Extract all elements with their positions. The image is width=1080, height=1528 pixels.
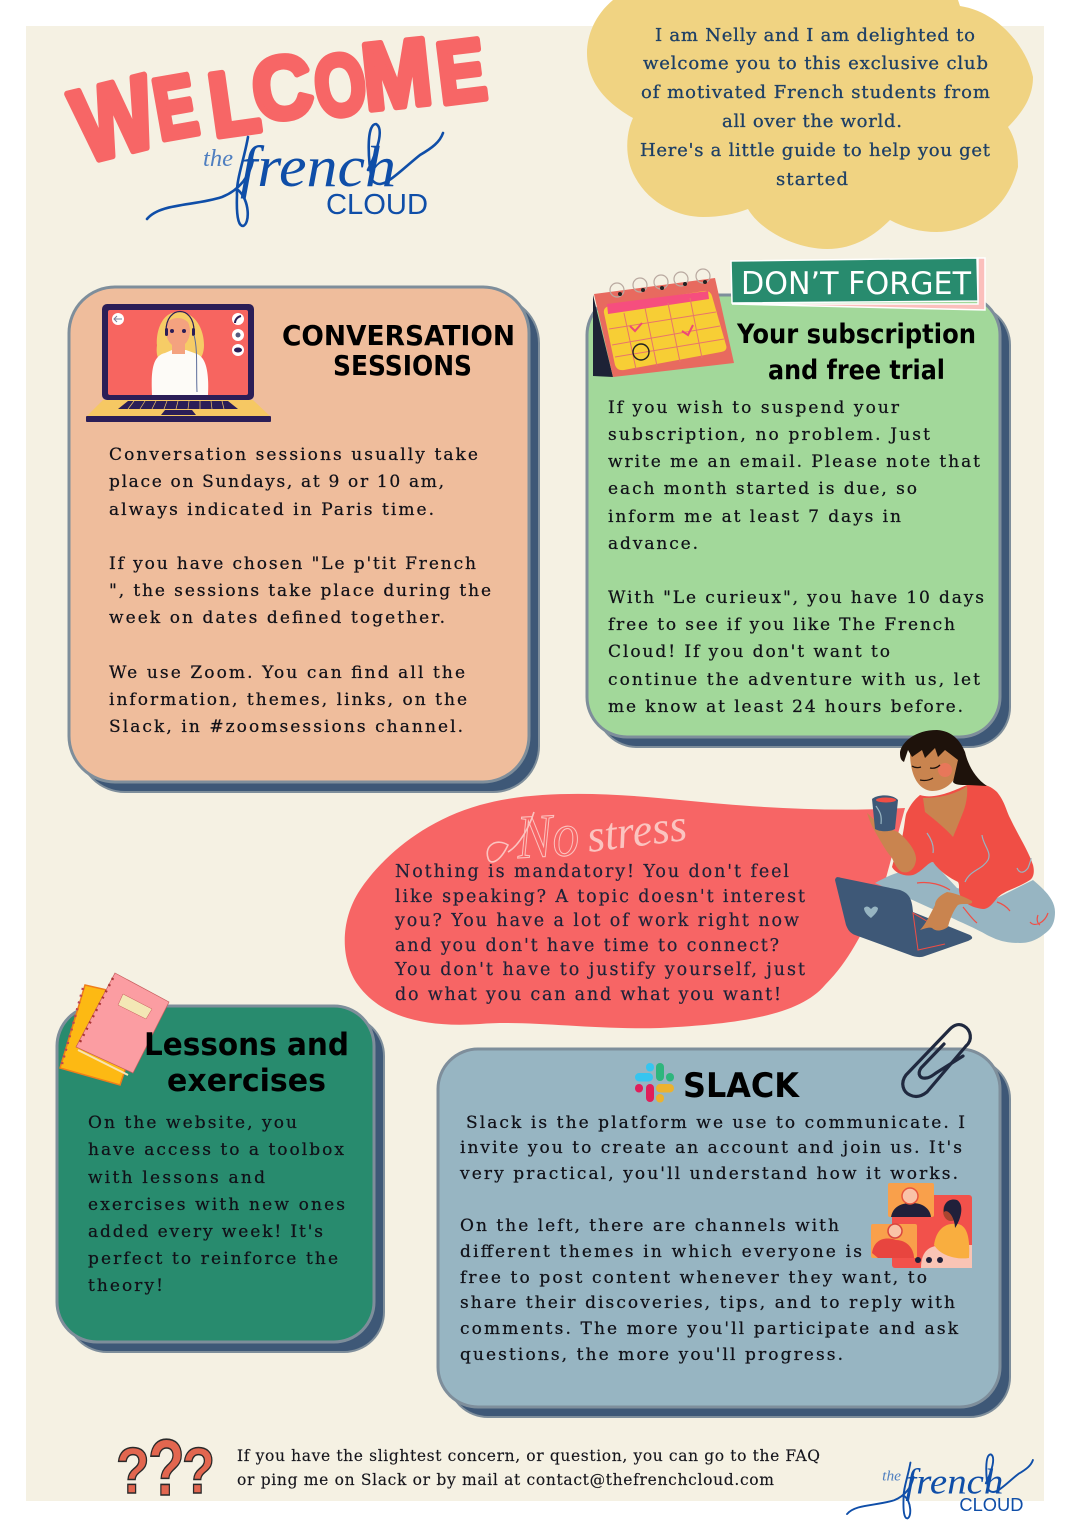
icon: slack logo xyxy=(635,1063,674,1102)
intro text: started xyxy=(776,169,848,190)
text: no stress body: Nothing is mandatory! You don't feel xyxy=(395,862,789,882)
text: no stress body: do what you can and what you want! xyxy=(395,985,781,1005)
text: conversation body: week on dates defined together. xyxy=(109,608,445,628)
text: subscription body: inform me at least 7 days in xyxy=(608,507,901,527)
panel: conversation sessions xyxy=(69,287,539,792)
icon: question marks: ? xyxy=(116,1435,150,1507)
heading: lessons and exercises: exercises xyxy=(167,1063,326,1099)
illustration: woman with laptop and cup xyxy=(835,730,1055,957)
text: conversation body: always indicated in Paris time. xyxy=(109,500,434,520)
title: welcome: L xyxy=(203,51,265,157)
text: subscription body: subscription, no problem. Just xyxy=(608,425,930,445)
panel: subscription and free trial xyxy=(587,258,1010,747)
text: conversation body: If you have chosen "Le p'tit French xyxy=(109,554,476,574)
heading: slack: SLACK xyxy=(683,1066,801,1106)
text: lessons body xyxy=(88,1113,345,1296)
text: no stress body: you? You have a lot of work right now xyxy=(394,911,799,931)
intro text: I am Nelly and I am delighted to xyxy=(655,25,975,46)
title: welcome: E xyxy=(146,56,204,158)
logo: the french cloud: the xyxy=(203,146,233,172)
heading: no stress: No xyxy=(514,801,581,872)
heading: your subscription and free trial: and free trial xyxy=(768,355,945,386)
text: conversation body: Conversation sessions usually take xyxy=(109,445,478,465)
text: lessons body: perfect to reinforce the xyxy=(88,1249,338,1269)
logo: the french cloud xyxy=(147,124,443,226)
text: conversation body: We use Zoom. You can find all the xyxy=(109,663,465,683)
illustration: video chat people xyxy=(871,1183,972,1268)
text: subscription body: each month started is due, so xyxy=(608,479,917,499)
logo: footer french cloud: the xyxy=(882,1469,901,1485)
text: subscription body: If you wish to suspend your xyxy=(608,398,900,418)
footer text: If you have the slightest concern, or question, you can go to the FAQ xyxy=(237,1447,820,1465)
text: slack body xyxy=(459,1113,965,1365)
logo: footer french cloud: french xyxy=(905,1461,1003,1501)
icon: question marks: ? xyxy=(148,1423,185,1512)
intro text: all over the world. xyxy=(722,111,902,132)
text: no stress body: and you don't have time to connect? xyxy=(395,936,779,956)
text: conversation body: ", the sessions take place during the xyxy=(109,581,491,601)
heading: no stress: stress xyxy=(584,799,689,862)
intro text: of motivated French students from xyxy=(641,82,990,103)
heading: lessons and exercises: Lessons and xyxy=(144,1027,349,1063)
title: welcome xyxy=(62,18,491,184)
logo: the french cloud: CLOUD xyxy=(326,189,428,221)
text: subscription body: advance. xyxy=(608,534,698,554)
title: welcome: W xyxy=(62,54,167,184)
text: slack body: On the left, there are channels with xyxy=(460,1216,839,1236)
icon: laptop with video call xyxy=(86,304,271,422)
heading: no stress xyxy=(487,799,689,872)
text: slack body: very practical, you'll understand how it works. xyxy=(459,1164,958,1184)
text: subscription body: write me an email. Please note that xyxy=(608,452,980,472)
text: slack body: free to post content whenever they want, to xyxy=(460,1268,927,1288)
heading: conversation sessions: CONVERSATION xyxy=(282,319,515,352)
text: conversation body: information, themes, links, on the xyxy=(109,690,467,710)
icon: question marks xyxy=(116,1423,215,1512)
footer text: or ping me on Slack or by mail at contact@thefrenchcloud.com xyxy=(237,1471,774,1489)
text: lessons body: theory! xyxy=(88,1276,163,1296)
text: lessons body: have access to a toolbox xyxy=(88,1140,344,1160)
title: welcome: C xyxy=(246,36,319,141)
intro text xyxy=(640,25,991,190)
intro text: Here's a little guide to help you get xyxy=(640,140,991,161)
text: subscription body: Cloud! If you don't want to xyxy=(608,642,890,662)
heading: conversation sessions xyxy=(282,319,515,382)
text: lessons body: exercises with new ones xyxy=(88,1195,345,1215)
logo: footer french cloud xyxy=(847,1454,1033,1518)
intro text: welcome you to this exclusive club xyxy=(643,53,988,74)
icon: notebooks xyxy=(60,973,169,1085)
icon: question marks: ? xyxy=(182,1434,215,1507)
heading: your subscription and free trial: Your subscription xyxy=(736,319,976,350)
text: subscription body: me know at least 24 hours before. xyxy=(608,697,963,717)
heading: your subscription and free trial xyxy=(736,319,976,386)
text: conversation body: Slack, in #zoomsessions channel. xyxy=(109,717,463,737)
icon: calendar xyxy=(593,269,734,377)
heading: conversation sessions: SESSIONS xyxy=(333,349,472,382)
banner: don't forget xyxy=(731,258,985,310)
text: slack body: invite you to create an account and join us. It's xyxy=(460,1138,962,1158)
text: slack body: Slack is the platform we use to communicate. I xyxy=(466,1113,965,1133)
text: lessons body: with lessons and xyxy=(88,1168,265,1188)
panel: lessons and exercises xyxy=(57,973,384,1352)
icon: paperclip xyxy=(903,1025,970,1096)
text: no stress body xyxy=(394,862,805,1005)
title: welcome: O xyxy=(308,35,372,137)
logo: the french cloud: french xyxy=(240,134,396,199)
text: slack body: questions, the more you'll progress. xyxy=(460,1345,843,1365)
title: welcome: M xyxy=(357,18,436,130)
text: slack body: comments. The more you'll participate and ask xyxy=(460,1319,959,1339)
text: conversation body xyxy=(109,445,491,737)
text: subscription body: With "Le curieux", you have 10 days xyxy=(608,588,984,608)
text: no stress body: You don't have to justify yourself, just xyxy=(394,960,805,980)
logo: footer french cloud: CLOUD xyxy=(959,1495,1023,1515)
title: welcome: E xyxy=(431,20,491,122)
intro cloud xyxy=(587,0,1033,249)
panel: slack xyxy=(438,1025,1010,1417)
text: lessons body: added every week! It's xyxy=(88,1222,323,1242)
text: slack body: different themes in which everyone is xyxy=(460,1242,862,1262)
text: subscription body xyxy=(608,398,984,717)
text: subscription body: continue the adventure with us, let xyxy=(608,670,980,690)
text: subscription body: free to see if you like The French xyxy=(608,615,955,635)
text: slack body: share their discoveries, tips, and to reply with xyxy=(460,1293,955,1313)
text: conversation body: place on Sundays, at 9 or 10 am, xyxy=(109,472,444,492)
banner: don't forget: DON’T FORGET xyxy=(741,266,972,302)
text: lessons body: On the website, you xyxy=(88,1113,297,1133)
heading: lessons and exercises xyxy=(144,1027,349,1099)
text: no stress body: like speaking? A topic doesn't interest xyxy=(395,887,805,907)
footer text xyxy=(237,1447,820,1489)
panel: no stress blob xyxy=(345,794,905,1028)
